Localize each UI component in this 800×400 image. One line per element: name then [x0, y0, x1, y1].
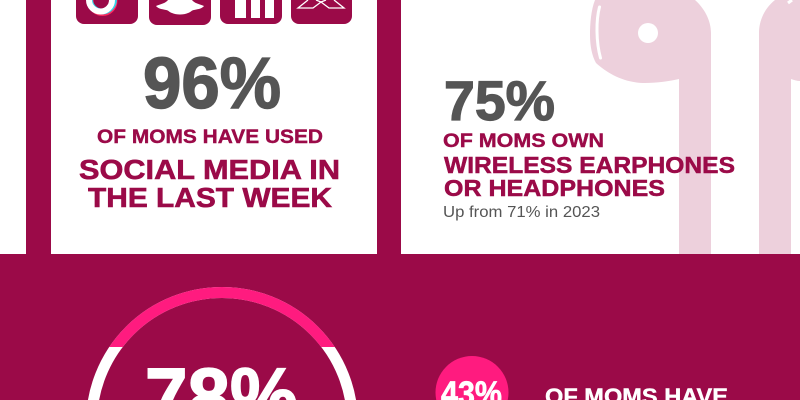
heading: wireless earphones or headphones — [444, 152, 735, 201]
note: up from 71%: Up from 71% in 2023 — [443, 204, 600, 221]
heading: wireless earphones or headphones: OR HEADPHONES — [444, 175, 665, 201]
stat: 75%: 75% — [444, 69, 555, 132]
icon: LinkedIn — [220, 0, 282, 24]
stat: 96%: 96% — [143, 44, 281, 124]
icon: TikTok — [76, 0, 138, 24]
heading: social media in the last week — [79, 154, 340, 213]
panel: wireless earphones — [401, 0, 800, 254]
panel: social media — [51, 0, 377, 254]
heading: social media in the last week: THE LAST WEEK — [88, 182, 332, 213]
heading: wireless earphones or headphones: WIRELESS EARPHONES — [444, 152, 735, 178]
panel: left edge — [0, 0, 26, 254]
icon: left earbud — [590, 0, 711, 254]
icon: Snapchat — [149, 0, 211, 25]
label: of moms own: OF MOMS OWN — [443, 130, 604, 152]
badge: 43% — [436, 356, 508, 400]
icon: right earbud — [759, 0, 800, 254]
icon: X — [291, 0, 352, 24]
label: of moms have used: OF MOMS HAVE USED — [97, 126, 323, 148]
heading: social media in the last week: SOCIAL MEDIA IN — [79, 154, 340, 185]
chart: 78% ring — [92, 292, 352, 400]
